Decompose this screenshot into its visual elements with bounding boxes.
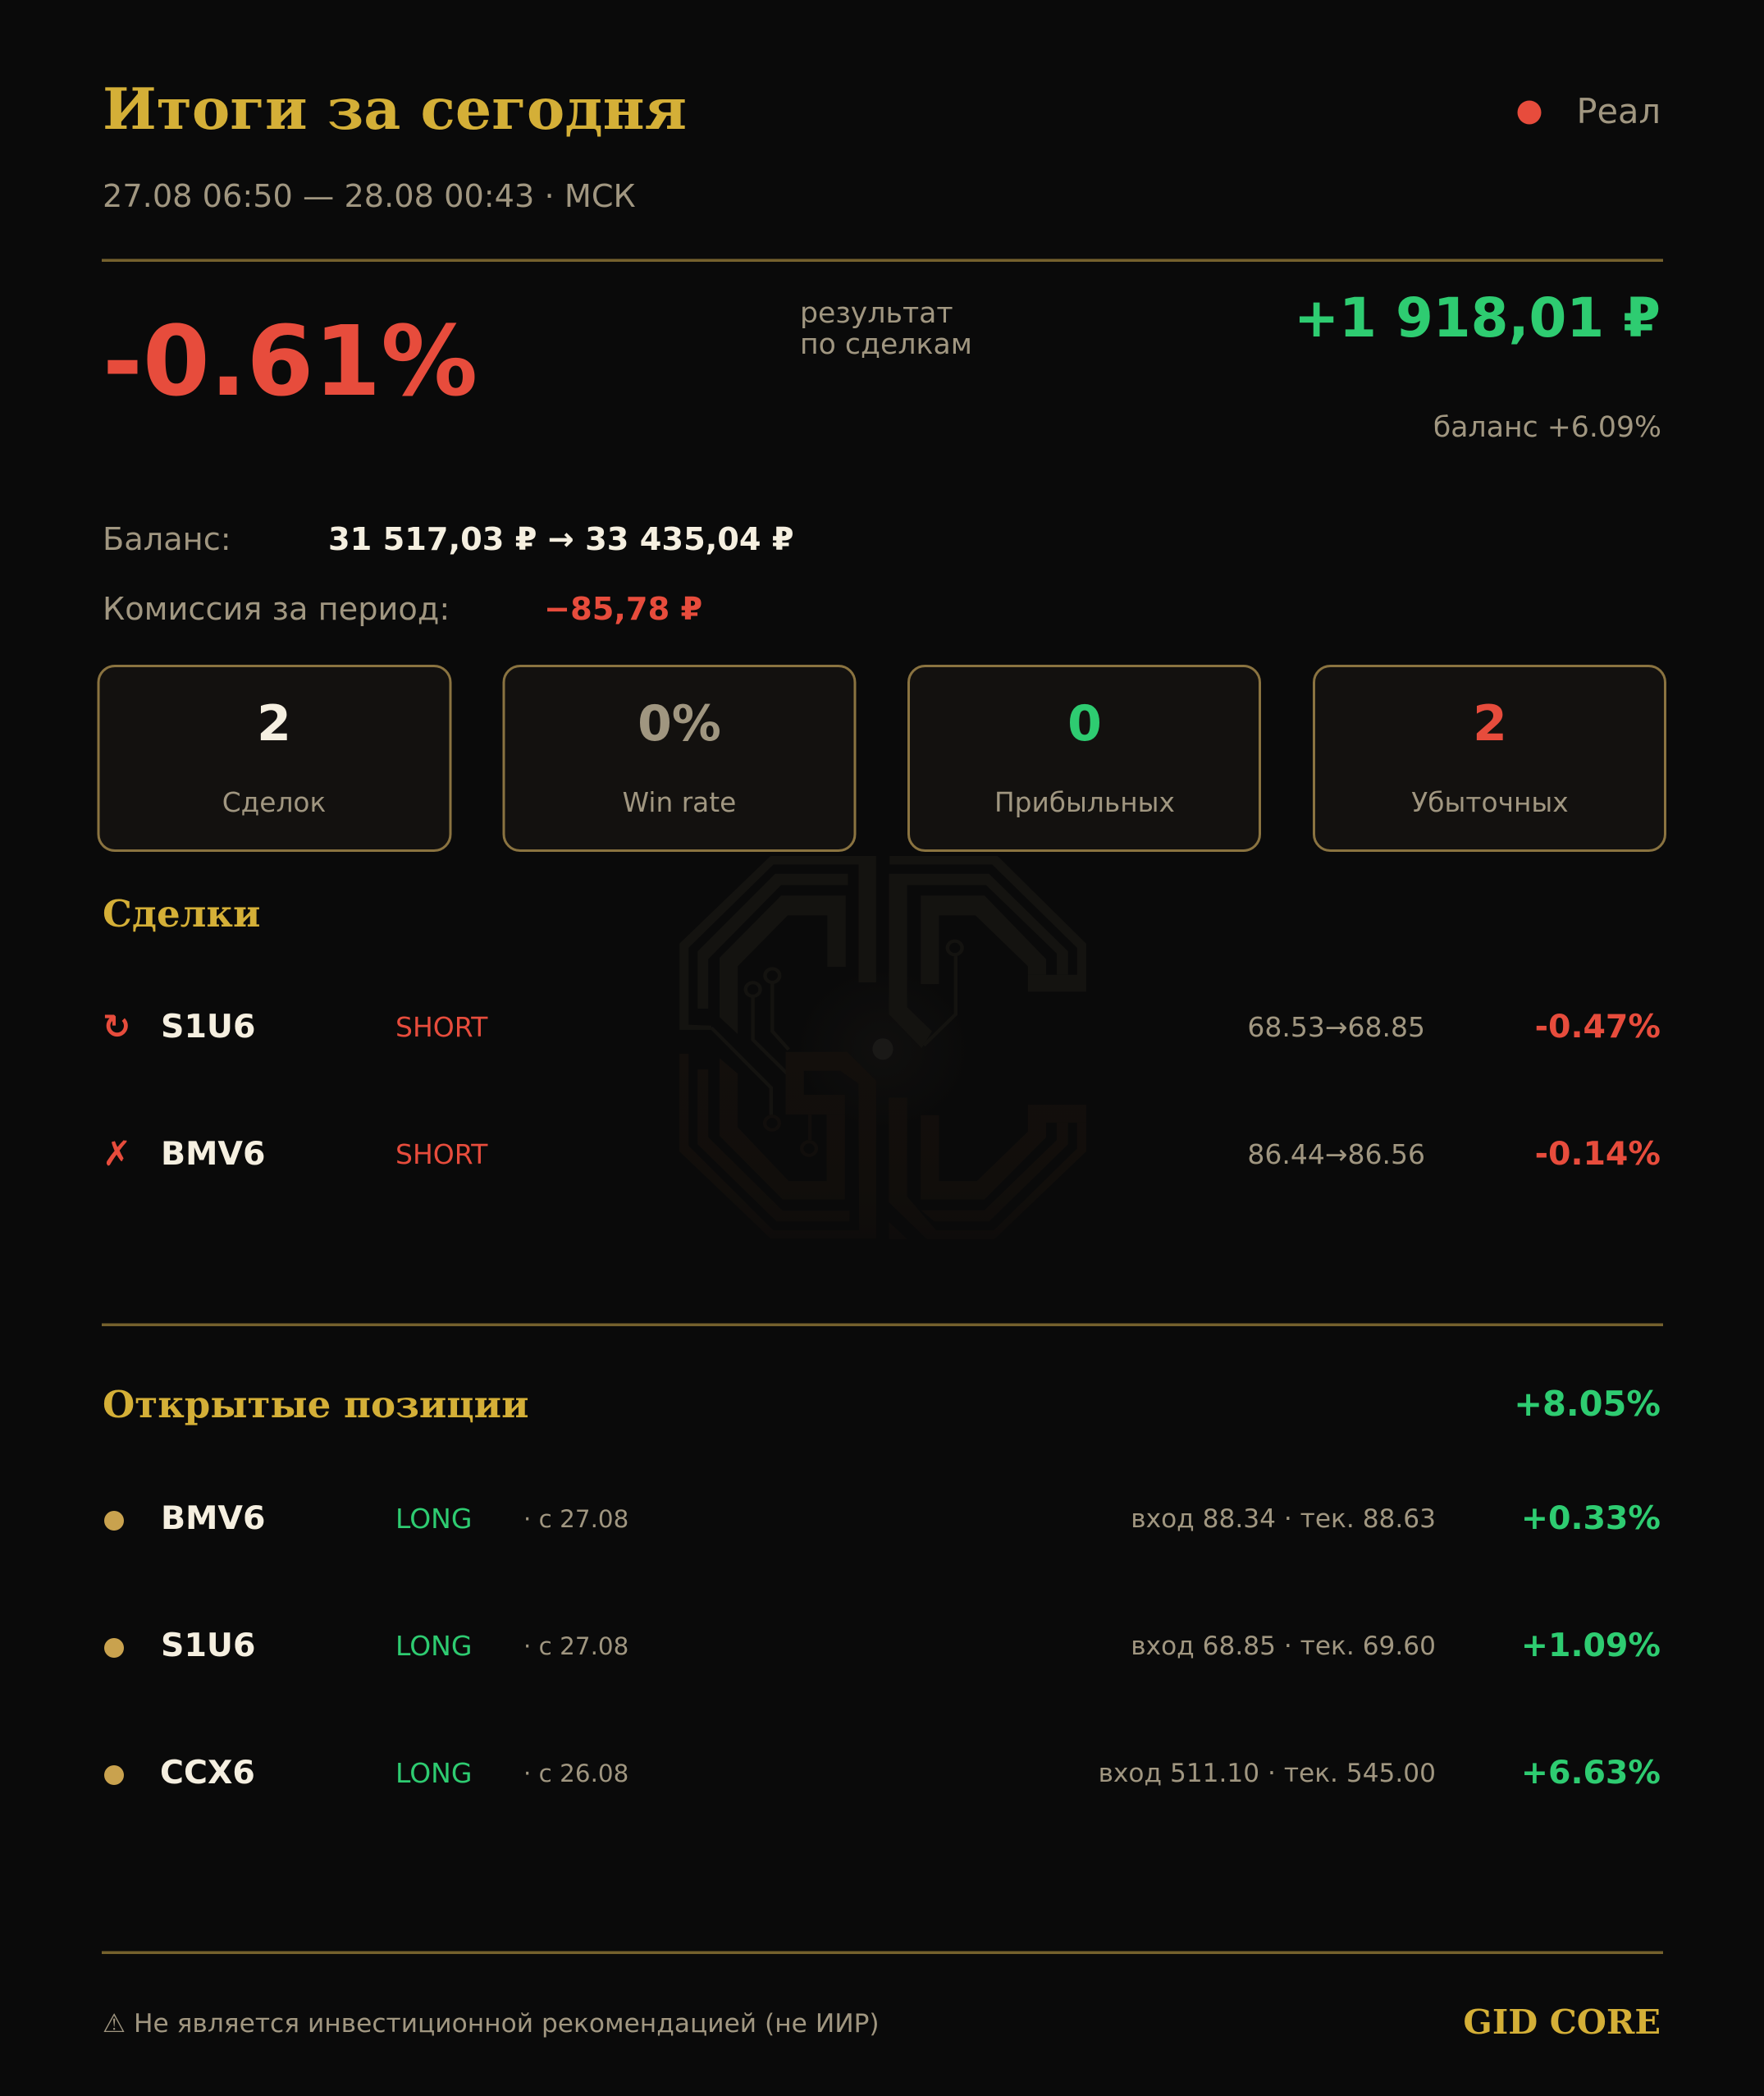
stat card: losing: Убыточных [1411,787,1569,818]
stat card: profitable: 0 [1067,695,1102,753]
stat card: profitable [909,666,1260,850]
deal row S1U6: -0.47% [1535,1008,1661,1046]
stat card: win rate: Win rate [623,787,736,818]
deal row BMV6 [103,1133,1661,1174]
open positions total: +8.05% [1514,1384,1661,1424]
main percent result: -0.61% [103,305,478,418]
deal row BMV6: 86.44→86.56 [1247,1138,1425,1170]
balance row: Баланс: [103,521,231,558]
position row S1U6 [104,1627,1661,1664]
stat card: profitable: Прибыльных [994,787,1175,818]
commission row: −85,78 ₽ [544,591,702,628]
footer disclaimer: ⚠ Не является инвестиционной рекомендацией (не ИИР) [103,2009,880,2039]
result label: по сделкам [800,328,972,361]
account status: real: Реал [1576,91,1661,131]
commission row: Комиссия за период: [103,591,450,628]
position row S1U6: вход 68.85 · тек. 69.60 [1131,1631,1436,1661]
heading: deals: Сделки [103,892,260,936]
title: Итоги за сегодня [103,76,687,143]
deal row S1U6: 68.53→68.85 [1247,1011,1425,1043]
period subtitle: 27.08 06:50 — 28.08 00:43 · МСК [103,178,636,215]
stat card: losing [1314,666,1666,850]
position row CCX6: +6.63% [1521,1754,1661,1792]
balance row [103,521,794,558]
stat card: win rate [504,666,855,850]
stat card: deals [98,666,450,850]
deal row S1U6: S1U6 [161,1008,256,1046]
footer brand: GID CORE [1463,2002,1661,2042]
position row S1U6: S1U6 [161,1627,256,1664]
deal row BMV6: ✗ [103,1133,131,1174]
stat card: deals: Сделок [222,787,326,818]
commission row [103,591,702,628]
position row CCX6 [104,1754,1661,1792]
deal row BMV6: -0.14% [1535,1135,1661,1173]
position row CCX6: вход 511.10 · тек. 545.00 [1099,1759,1436,1788]
deal row BMV6: BMV6 [161,1135,265,1173]
position row CCX6: LONG [395,1757,472,1789]
account status: real [1518,91,1661,131]
trade result amount: +1 918,01 ₽ [1294,286,1661,350]
position row BMV6: +0.33% [1521,1499,1661,1537]
stat card: losing: 2 [1473,695,1507,753]
position row S1U6: +1.09% [1521,1627,1661,1664]
balance row: 31 517,03 ₽ → 33 435,04 ₽ [328,521,794,558]
deal row S1U6: SHORT [395,1011,488,1043]
position row BMV6: LONG [395,1503,472,1535]
watermark logo [679,856,1086,1239]
position row BMV6: вход 88.34 · тек. 88.63 [1131,1504,1436,1534]
deal row S1U6: ↻ [103,1007,130,1046]
position row BMV6: BMV6 [161,1499,265,1537]
position row CCX6: · с 26.08 [523,1760,628,1787]
position row BMV6: · с 27.08 [523,1505,628,1533]
deal row S1U6 [103,1007,1661,1046]
position row CCX6: CCX6 [160,1754,255,1792]
position row S1U6: LONG [395,1630,472,1662]
heading: open positions: Открытые позиции [103,1383,529,1426]
position row S1U6: · с 27.08 [523,1632,628,1660]
position row BMV6 [104,1499,1661,1537]
balance change: баланс +6.09% [1433,411,1661,444]
stat card: deals: 2 [257,695,291,753]
deal row BMV6: SHORT [395,1138,488,1170]
stat card: win rate: 0% [638,695,721,753]
result label: результат [800,297,953,330]
